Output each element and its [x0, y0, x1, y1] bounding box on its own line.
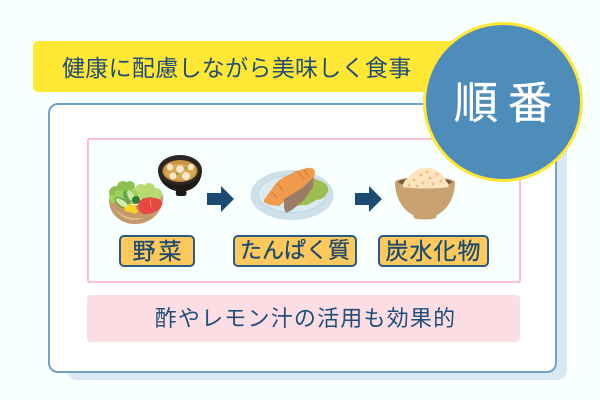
label: vegetables	[119, 235, 195, 267]
panel: food order	[87, 138, 521, 283]
label: carbohydrate: 炭水化物	[386, 238, 482, 264]
main card	[48, 103, 557, 373]
badge: order	[423, 22, 583, 182]
icon: salmon plate	[250, 168, 334, 220]
callout: vinegar and lemon	[87, 295, 520, 342]
header banner	[33, 41, 463, 92]
arrow: protein to carbohydrate	[355, 186, 382, 212]
label: vegetables: 野菜	[132, 238, 184, 264]
callout: vinegar and lemon: 酢やレモン汁の活用も効果的	[155, 306, 456, 331]
icon: rice bowl	[395, 168, 455, 220]
badge: order: 順番	[454, 79, 562, 128]
arrow: vegetables to protein	[207, 186, 234, 212]
icon: miso soup	[158, 155, 202, 196]
label: protein	[233, 235, 357, 267]
icon: salad	[109, 181, 163, 224]
card shadow	[67, 112, 567, 380]
header text: 健康に配慮しながら美味しく食事	[62, 55, 412, 81]
label: protein: たんぱく質	[240, 238, 350, 263]
